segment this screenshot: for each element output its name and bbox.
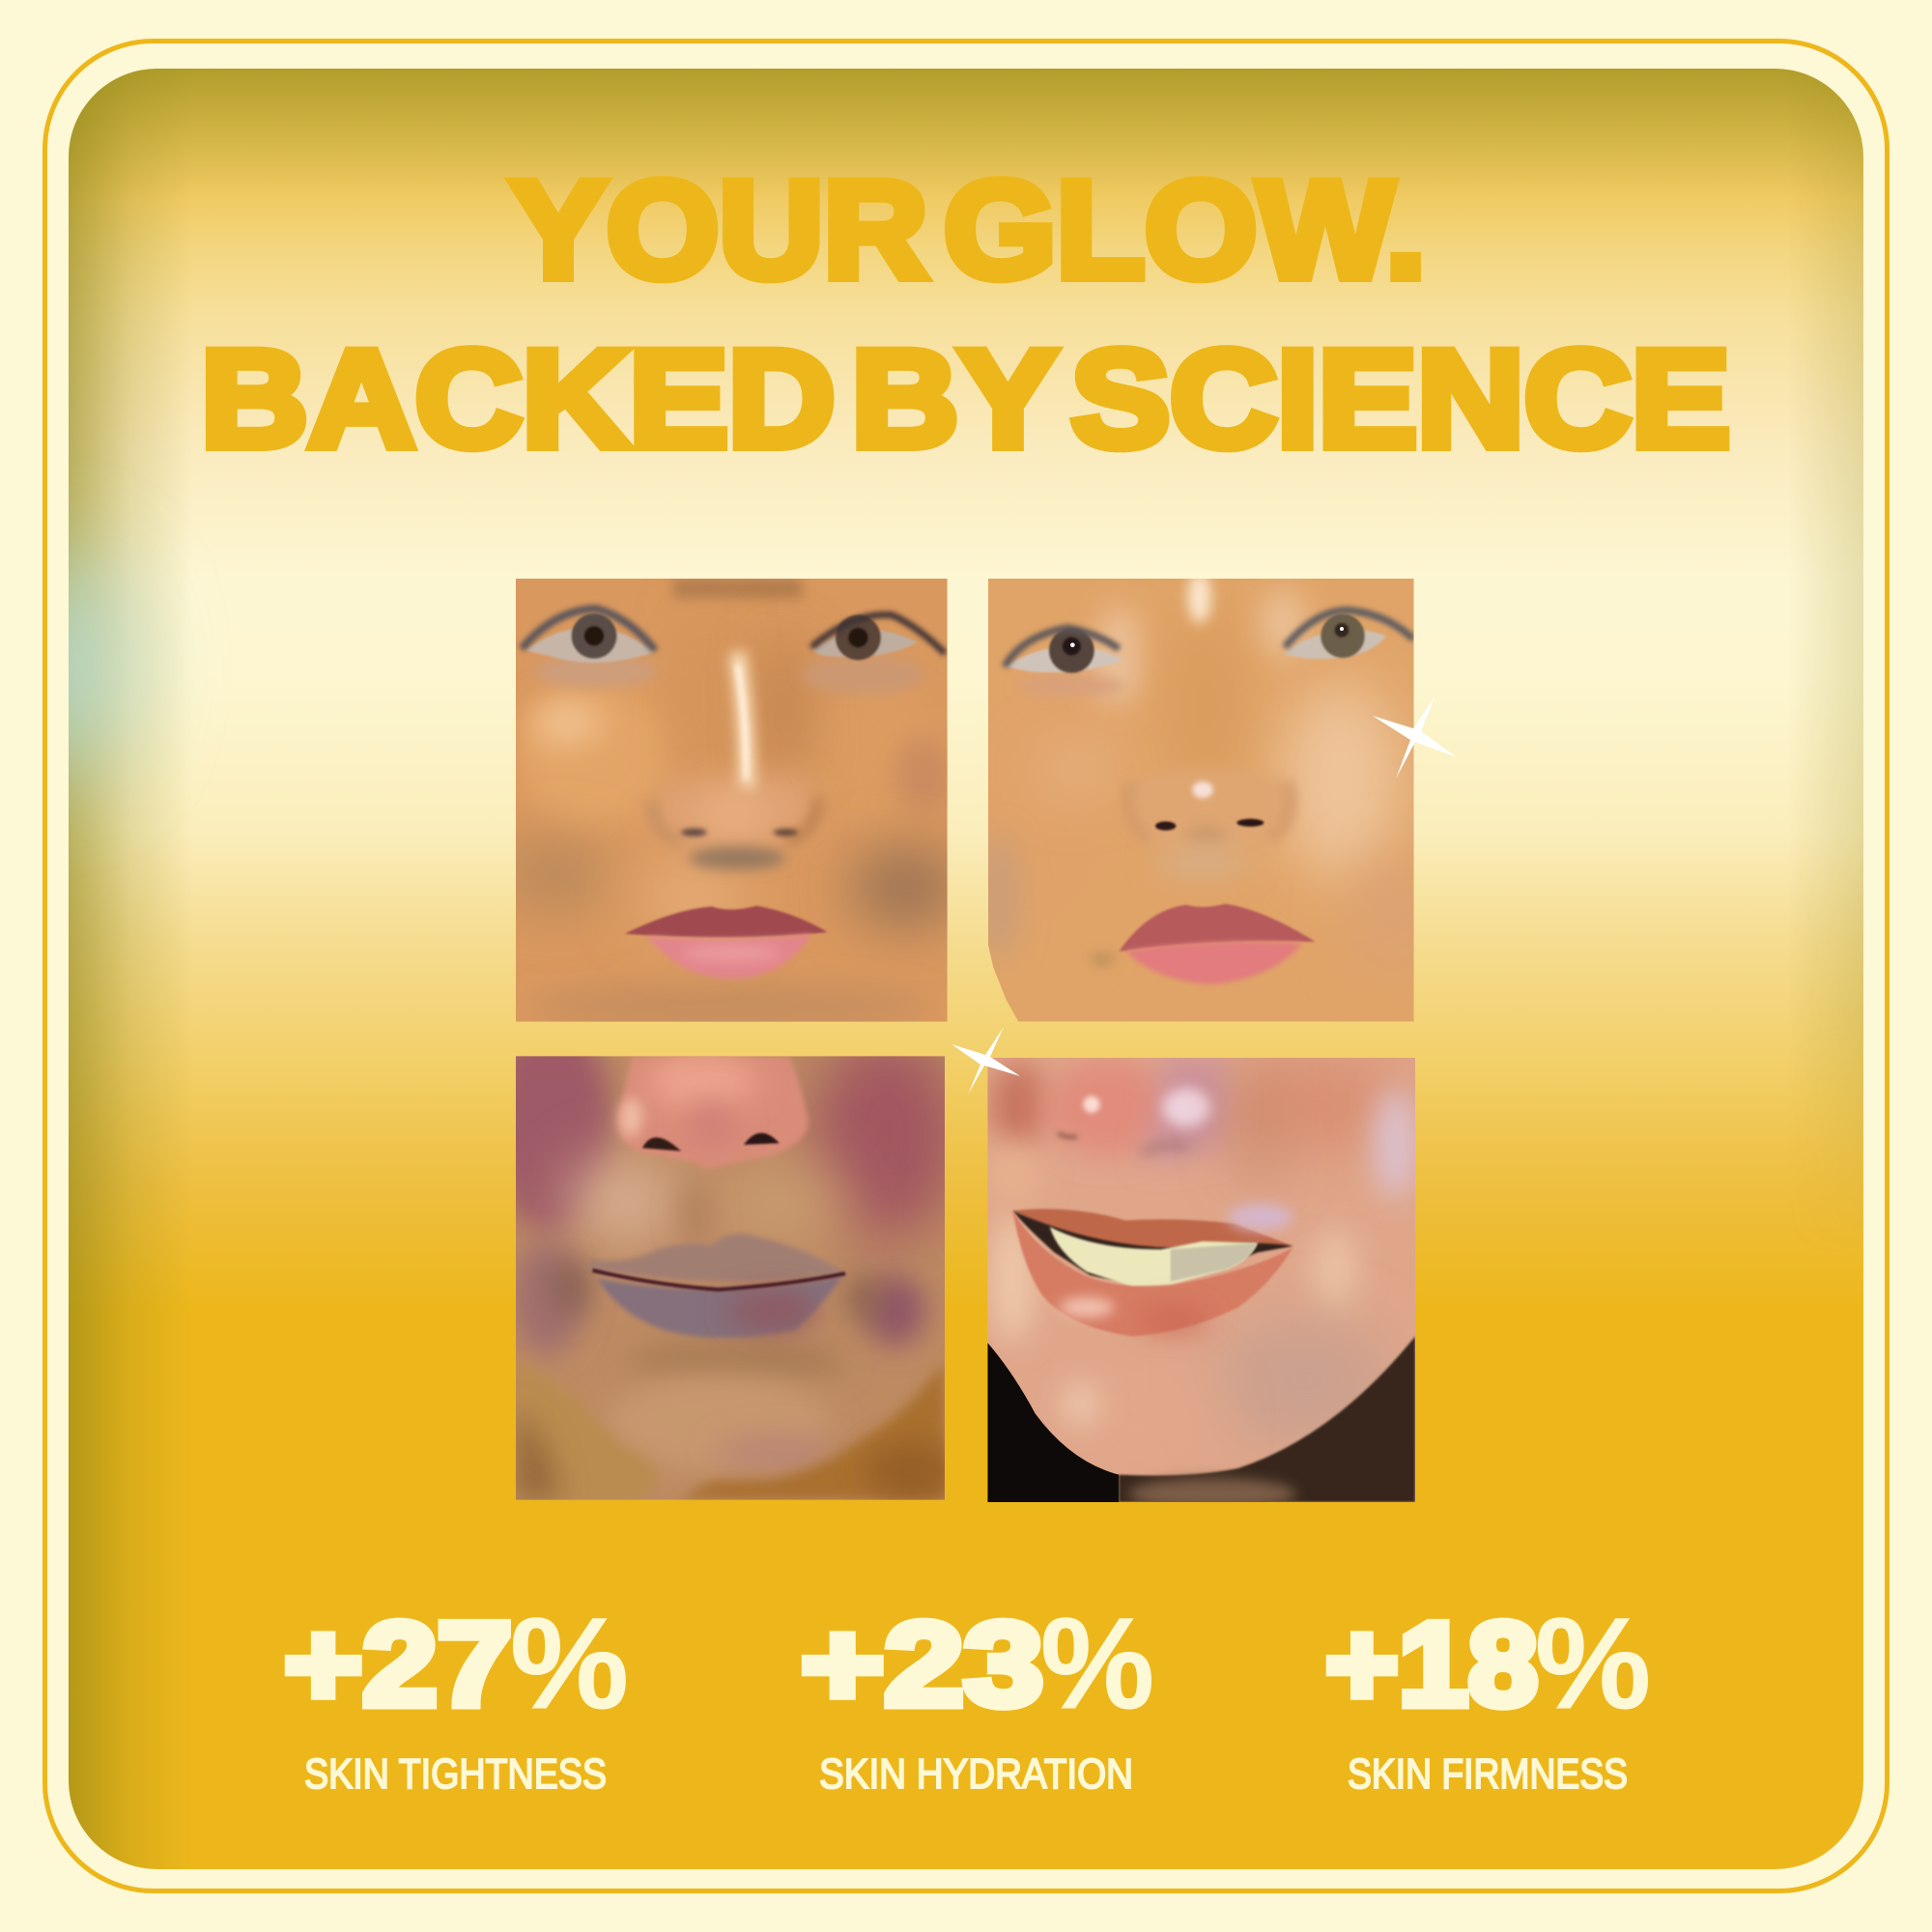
title xyxy=(201,154,1730,476)
stat: skin hydration: % xyxy=(1040,1592,1154,1736)
eye right xyxy=(1283,611,1413,659)
stat: skin tightness: % xyxy=(510,1592,629,1736)
photo: before, eyes to lips xyxy=(499,579,959,1029)
eye left xyxy=(1005,628,1123,673)
stat: skin tightness xyxy=(284,1592,629,1798)
sparkle: upper right xyxy=(1373,696,1457,779)
dark background and neck xyxy=(987,1336,1415,1510)
stat: skin tightness: SKIN TIGHTNESS xyxy=(304,1750,607,1798)
stat: skin firmness: +18 xyxy=(1325,1599,1538,1731)
title line 2: BACKED BY SCIENCE xyxy=(201,323,1730,476)
neck below jaw xyxy=(516,1359,956,1500)
photo: after, eyes to lips xyxy=(974,572,1432,1022)
title line 1: YOUR GLOW. xyxy=(510,154,1426,307)
stat: skin hydration xyxy=(801,1592,1154,1798)
stat: skin firmness: SKIN FIRMNESS xyxy=(1348,1750,1628,1798)
stat: skin hydration: +23 xyxy=(801,1599,1043,1731)
lips xyxy=(1094,904,1316,984)
stat: skin firmness xyxy=(1325,1592,1651,1798)
nose xyxy=(1128,768,1294,874)
sparkle: centre xyxy=(952,1027,1020,1094)
photo: after, smiling lips xyxy=(983,1056,1418,1510)
nose xyxy=(1045,1058,1270,1176)
stat: skin hydration: SKIN HYDRATION xyxy=(819,1750,1133,1798)
lips xyxy=(589,1234,847,1338)
stat: skin firmness: % xyxy=(1535,1592,1651,1736)
eye right xyxy=(811,614,945,660)
stat: skin tightness: +27 xyxy=(284,1599,512,1731)
lips xyxy=(625,906,828,979)
photo: before, nose and lips with redness xyxy=(516,1056,945,1500)
lips and teeth xyxy=(1012,1205,1293,1336)
nose xyxy=(618,1053,809,1169)
nose xyxy=(653,652,818,869)
eye left xyxy=(522,609,655,663)
